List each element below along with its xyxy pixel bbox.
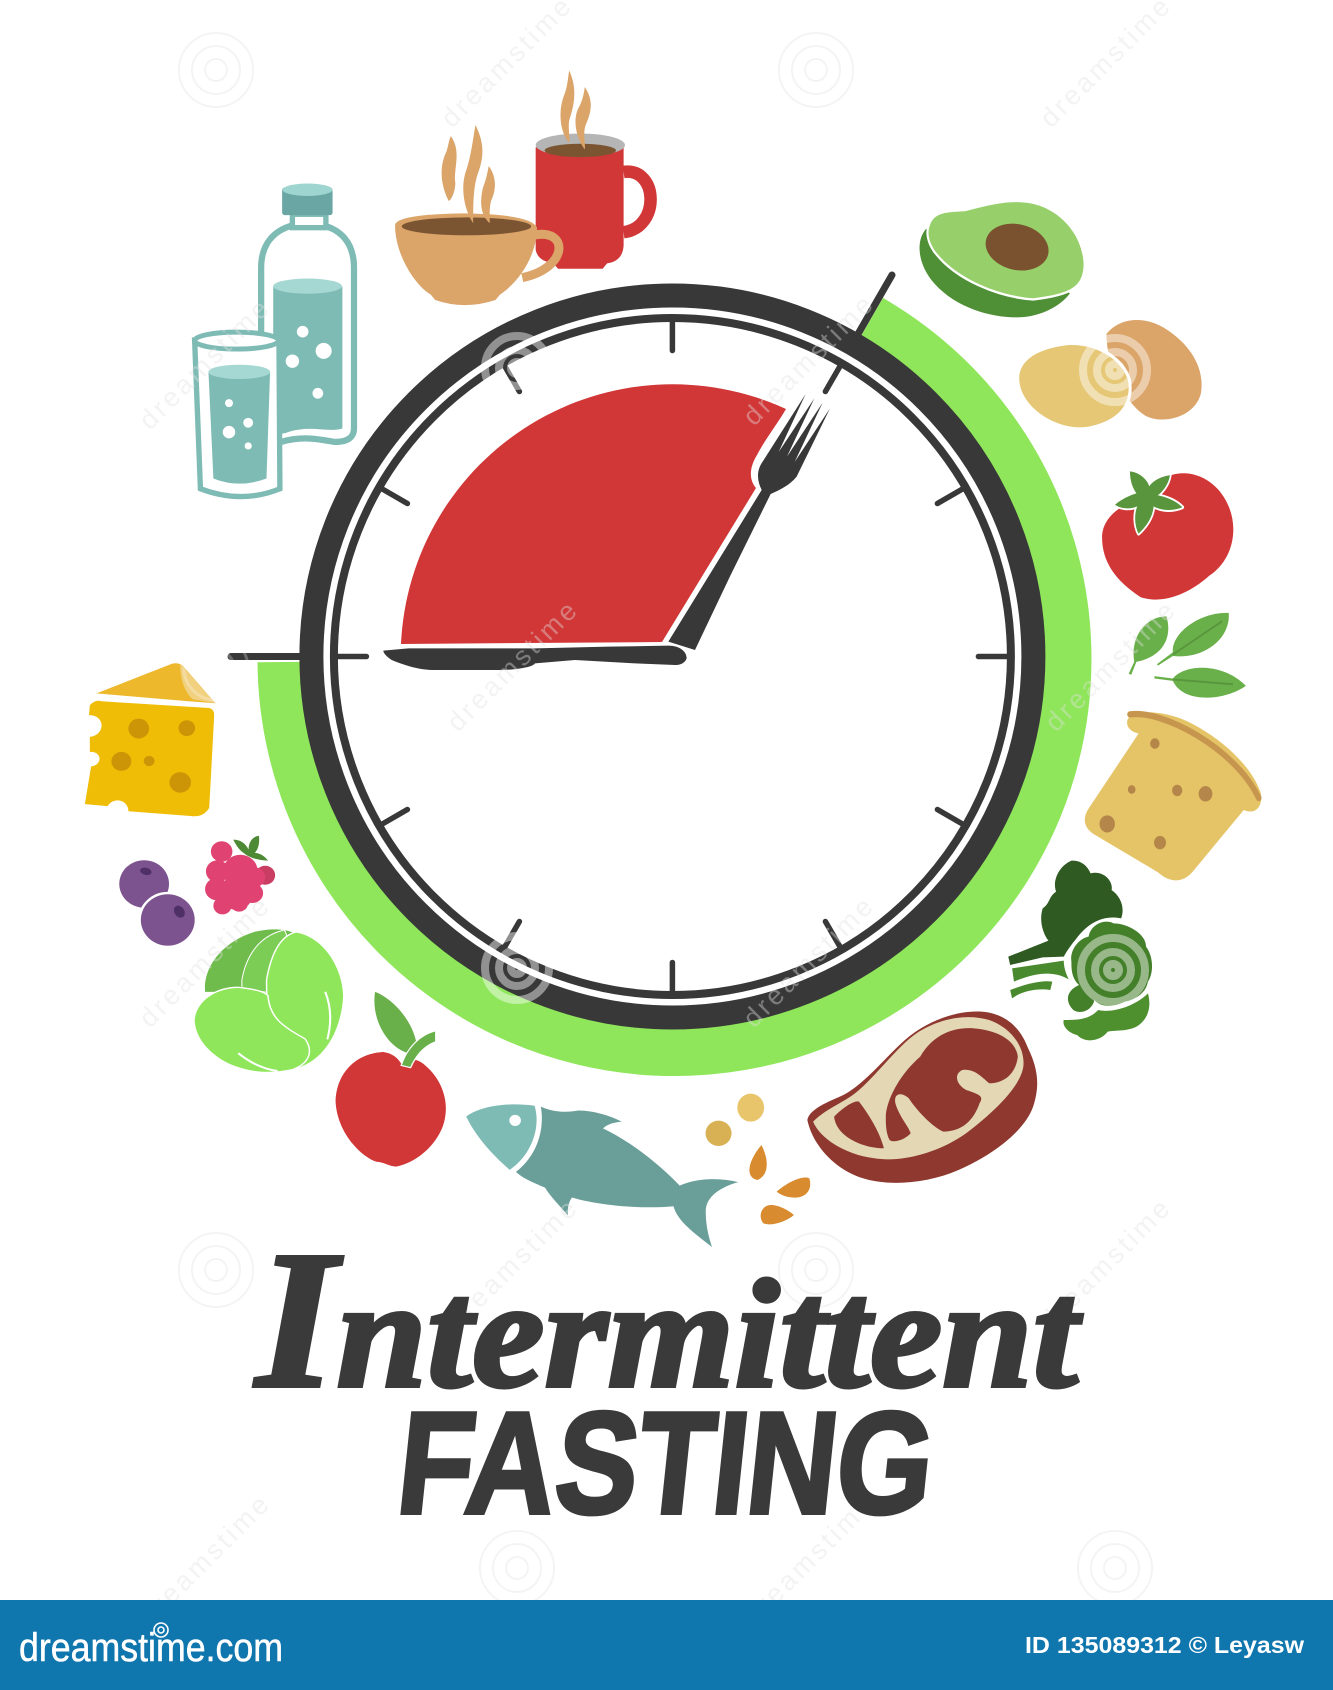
red fasting sector — [401, 384, 786, 644]
icon: cabbage — [195, 929, 343, 1072]
icon: toast — [1085, 712, 1261, 880]
icon: eggs — [1019, 320, 1202, 427]
knife hand — [383, 646, 687, 670]
icon: water bottle — [261, 183, 354, 442]
icon: red mug — [536, 71, 651, 269]
infographic canvas: dreamstime — [133, 1490, 274, 1631]
footer logo spiral — [154, 1623, 168, 1637]
green eating-window arc — [284, 321, 1064, 1049]
infographic canvas: dreamstime — [1039, 596, 1180, 737]
icon: broccoli — [1008, 861, 1152, 1040]
infographic canvas: dreamstime — [1034, 1194, 1175, 1335]
icons in the right column — [920, 202, 1261, 880]
icon: nuts — [706, 1094, 810, 1224]
icons in the lower-left group — [85, 663, 738, 1247]
footer logo text: dreamstime.com — [19, 1626, 283, 1670]
infographic canvas: dreamstime — [133, 294, 274, 435]
icon: blueberries — [119, 860, 195, 946]
icon: fish — [466, 1104, 738, 1247]
icon: steak — [807, 1011, 1037, 1183]
icon: apple — [336, 992, 446, 1167]
icon: tomato — [1102, 471, 1233, 600]
fork hand — [668, 394, 830, 650]
infographic canvas: dreamstime — [441, 596, 582, 737]
infographic canvas: dreamstime — [737, 290, 878, 431]
infographic canvas: dreamstime — [737, 892, 878, 1033]
clock outer ring — [311, 296, 1033, 1018]
long marker at nine o'clock — [231, 653, 302, 660]
infographic canvas: dreamstime — [133, 892, 274, 1033]
icon: glass of water — [195, 332, 280, 497]
icon: avocado — [920, 202, 1084, 317]
icon: raspberry — [205, 836, 275, 914]
footer bar — [0, 1600, 1333, 1690]
title: Intermittent: Intermittent — [254, 1210, 1082, 1429]
infographic canvas: dreamstime — [737, 1490, 878, 1631]
icon: coffee cup — [395, 125, 559, 305]
clock tick marks — [334, 318, 1011, 995]
infographic canvas: dreamstime — [441, 1194, 582, 1335]
icons in the lower-right group — [706, 861, 1152, 1224]
clock inner ring — [334, 318, 1011, 995]
icon: spinach leaves — [1129, 613, 1246, 698]
icons in the upper-left group — [195, 71, 651, 497]
icon: cheese — [85, 663, 215, 816]
footer image id: ID 135089312 © Leyasw — [1025, 1632, 1304, 1658]
long marker at one o'clock — [858, 275, 892, 334]
panel: clock — [231, 275, 1064, 1049]
title: FASTING: FASTING — [391, 1381, 942, 1544]
